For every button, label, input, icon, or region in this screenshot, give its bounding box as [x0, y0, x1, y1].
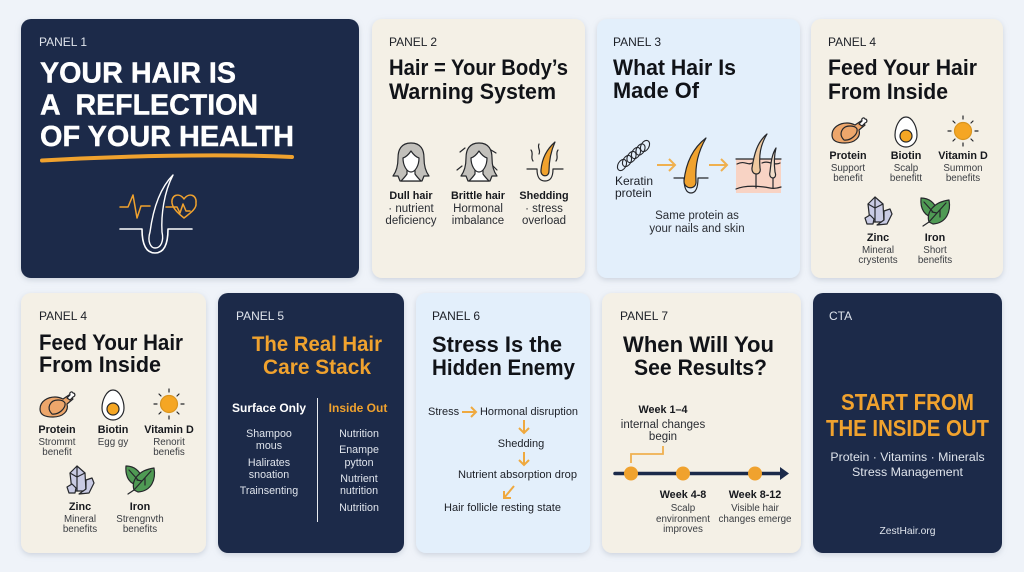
text: vitamin d: benefis — [153, 447, 185, 458]
label: panel 1: PANEL 1 — [39, 35, 87, 49]
text: pillars: Protein · Vitamins · Minerals — [830, 450, 985, 464]
heading: stress is the hidden enemy: Hidden Enemy — [432, 355, 576, 380]
heading: start from the inside out — [826, 389, 989, 441]
text: keratin protein — [615, 174, 653, 200]
text: week 1-4: begin — [649, 431, 677, 443]
column: surface only: Halirates — [248, 457, 290, 469]
text: vitamin d: Vitamin D — [144, 424, 194, 436]
text: brittle hair: Brittle hair — [451, 190, 506, 202]
label: panel 4: PANEL 4 — [828, 35, 876, 49]
icon: keratin coil — [616, 139, 651, 172]
heading: feed your hair from inside: Feed Your Hair — [828, 55, 977, 80]
column: surface only: Shampoo — [246, 428, 292, 440]
panel 5: hair care stack — [218, 293, 404, 553]
text: zinc: Zinc — [69, 501, 91, 513]
heading: the real hair care stack: Care Stack — [263, 356, 371, 379]
icon: chicken — [40, 392, 75, 417]
text: biotin: Egg gy — [98, 437, 128, 448]
arrow — [657, 159, 675, 171]
heading: feed your hair from inside: From Inside — [39, 352, 161, 377]
text: week 8-12: changes emerge — [719, 514, 792, 525]
icon: dull hair — [393, 143, 429, 181]
heading: feed your hair from inside — [828, 55, 977, 104]
heading: feed your hair from inside: From Inside — [828, 79, 948, 104]
panel 6: stress — [416, 293, 590, 553]
column: inside out — [329, 401, 387, 514]
text: week 8-12: Visible hair — [731, 503, 780, 514]
text: iron: benefits — [918, 255, 952, 266]
icon: skin cross-section — [736, 134, 781, 193]
title: your hair is a reflection of your health — [40, 58, 294, 153]
text: week 1-4 — [621, 404, 705, 443]
arrow — [709, 159, 727, 171]
heading: the real hair care stack: The Real Hair — [252, 333, 382, 356]
text: protein: Strommt — [38, 437, 76, 448]
icon: zinc crystal — [67, 466, 94, 494]
text: week 4-8: Scalp — [671, 503, 696, 514]
panel 3: what hair is made of — [597, 19, 800, 278]
text: week 8-12 — [719, 489, 792, 525]
text: biotin: Biotin — [98, 424, 128, 436]
heading: start from the inside out: THE INSIDE OUT — [826, 415, 989, 441]
icon: egg — [102, 390, 124, 420]
text: iron: benefits — [123, 524, 157, 535]
title: your hair is a reflection of your health: YOUR HAIR IS — [40, 58, 236, 90]
panel 1: hero — [21, 19, 359, 278]
text: biotin — [98, 424, 128, 448]
text: week 4-8: Week 4-8 — [660, 489, 706, 501]
text: protein: Support — [831, 163, 865, 174]
text: brittle hair: Hormonal — [453, 203, 503, 215]
text: dull hair: Dull hair — [389, 190, 433, 202]
caption: same protein: Same protein as — [655, 210, 739, 222]
text: website: ZestHair.org — [879, 526, 936, 537]
heading: when will you see results: When Will You — [623, 332, 774, 357]
text: zinc — [858, 232, 898, 266]
heading: hair warning system: Warning System — [389, 79, 556, 104]
heading: when will you see results — [623, 332, 774, 380]
text: protein — [38, 424, 76, 458]
icon: brittle hair — [457, 143, 497, 181]
text: biotin: benefitt — [890, 173, 922, 184]
caption: same protein: your nails and skin — [649, 223, 745, 235]
icon: zinc crystal — [865, 197, 892, 225]
text: shedding — [519, 190, 569, 227]
heading: start from the inside out: START FROM — [841, 389, 974, 415]
icon: hair follicle with pulse and heart — [120, 175, 196, 253]
title: your hair is a reflection of your health: A REFLECTION — [40, 90, 258, 122]
label: cta: CTA — [829, 309, 852, 323]
text: brittle hair — [451, 190, 506, 227]
text: zinc: crystents — [858, 255, 898, 266]
panel 2: warning system — [372, 19, 585, 278]
text: zinc — [63, 501, 97, 535]
label: panel 7: PANEL 7 — [620, 309, 668, 323]
text: week 4-8: environment — [656, 514, 710, 525]
connector — [631, 446, 663, 463]
column: inside out: Nutrition — [339, 428, 379, 440]
text: zinc: Mineral — [64, 514, 96, 525]
text: dull hair: deficiency — [385, 215, 437, 227]
text: biotin: Biotin — [891, 150, 921, 162]
heading: when will you see results: See Results? — [634, 355, 767, 380]
heading: stress is the hidden enemy — [432, 332, 576, 380]
icon: egg — [895, 117, 917, 147]
text: week 4-8 — [656, 489, 710, 535]
text: zinc: Zinc — [867, 232, 889, 244]
text: protein: benefit — [42, 447, 72, 458]
heading: the real hair care stack — [252, 333, 382, 379]
text: iron: Short — [923, 245, 947, 256]
text: vitamin d: benefits — [946, 173, 980, 184]
text: vitamin d — [938, 150, 988, 184]
text: week 4-8: improves — [663, 524, 703, 535]
icon: iron leaf — [921, 198, 949, 226]
heading: feed your hair from inside: Feed Your Hair — [39, 330, 183, 355]
heading: hair warning system: Hair = Your Body’s — [389, 55, 568, 80]
text: iron: Iron — [925, 232, 945, 244]
icon: sun — [948, 116, 978, 146]
icon: hair strand with follicle — [674, 138, 708, 193]
icon: chicken — [832, 118, 867, 143]
text: pillars — [830, 450, 985, 479]
icon: shedding follicle — [527, 142, 563, 181]
flow: stress chain: Nutrient absorption drop — [458, 469, 577, 481]
text: protein: benefit — [833, 173, 863, 184]
column: inside out: nutrition — [340, 485, 378, 497]
text: vitamin d: Vitamin D — [938, 150, 988, 162]
caption: same protein — [649, 210, 745, 235]
text: protein: Protein — [38, 424, 76, 436]
text: shedding: · stress — [525, 203, 563, 215]
panel 4: feed your hair — [811, 19, 1003, 278]
text: week 1-4: internal changes — [621, 419, 705, 431]
column: surface only: Trainsenting — [240, 485, 298, 497]
flow: stress chain: Hormonal disruption — [480, 406, 578, 418]
title: your hair is a reflection of your health: OF YOUR HEALTH — [40, 121, 294, 153]
text: week 1-4: Week 1–4 — [638, 404, 688, 416]
flow: stress chain — [428, 406, 578, 514]
panel: call to action — [813, 293, 1002, 553]
icon: iron leaf — [126, 466, 154, 494]
text: vitamin d: Renorit — [153, 437, 185, 448]
text: week 8-12: Week 8-12 — [729, 489, 781, 501]
flow: stress chain: Shedding — [498, 438, 544, 450]
text: iron: Iron — [130, 501, 150, 513]
underline accent — [42, 155, 292, 160]
flow: stress chain: Stress — [428, 406, 460, 418]
text: iron — [918, 232, 952, 266]
icon: sun — [154, 389, 184, 419]
panel 7: timeline — [602, 293, 801, 553]
column: surface only: snoation — [249, 469, 289, 481]
column: inside out: Inside Out — [329, 401, 387, 415]
text: keratin protein: Keratin — [615, 174, 653, 188]
panel 4 repeat: feed your hair — [21, 293, 206, 553]
heading: what hair is made of: Made Of — [613, 78, 700, 103]
label: panel 5: PANEL 5 — [236, 309, 284, 323]
text: zinc: Mineral — [862, 245, 894, 256]
text: brittle hair: imbalance — [452, 215, 504, 227]
column: inside out: pytton — [344, 457, 374, 469]
text: dull hair: · nutrient — [388, 203, 434, 215]
text: dull hair — [385, 190, 437, 227]
column: surface only: mous — [256, 440, 282, 452]
text: iron: Strengnvth — [116, 514, 164, 525]
text: biotin — [890, 150, 922, 184]
label: panel 3: PANEL 3 — [613, 35, 661, 49]
column: surface only: Surface Only — [232, 401, 306, 415]
text: pillars: Stress Management — [852, 465, 963, 479]
text: protein — [829, 150, 867, 184]
column: inside out: Nutrient — [340, 473, 378, 485]
heading: what hair is made of: What Hair Is — [613, 55, 736, 80]
heading: what hair is made of — [613, 55, 736, 103]
text: zinc: benefits — [63, 524, 97, 535]
column: surface only — [232, 401, 306, 497]
text: keratin protein: protein — [615, 186, 652, 200]
text: shedding: overload — [522, 215, 566, 227]
text: vitamin d: Summon — [943, 163, 983, 174]
text: biotin: Scalp — [894, 163, 919, 174]
label: panel 2: PANEL 2 — [389, 35, 437, 49]
text: shedding: Shedding — [519, 190, 569, 202]
label: panel 6: PANEL 6 — [432, 309, 480, 323]
heading: stress is the hidden enemy: Stress Is the — [432, 332, 562, 357]
column: inside out: Enampe — [339, 444, 379, 456]
text: iron — [116, 501, 164, 535]
text: vitamin d — [144, 424, 194, 458]
text: protein: Protein — [829, 150, 867, 162]
heading: hair warning system — [389, 55, 568, 104]
column: inside out: Nutrition — [339, 502, 379, 514]
label: panel 4: PANEL 4 — [39, 309, 87, 323]
flow: stress chain: Hair follicle resting state — [444, 502, 561, 514]
timeline bar with markers — [615, 466, 789, 480]
heading: feed your hair from inside — [39, 330, 183, 377]
